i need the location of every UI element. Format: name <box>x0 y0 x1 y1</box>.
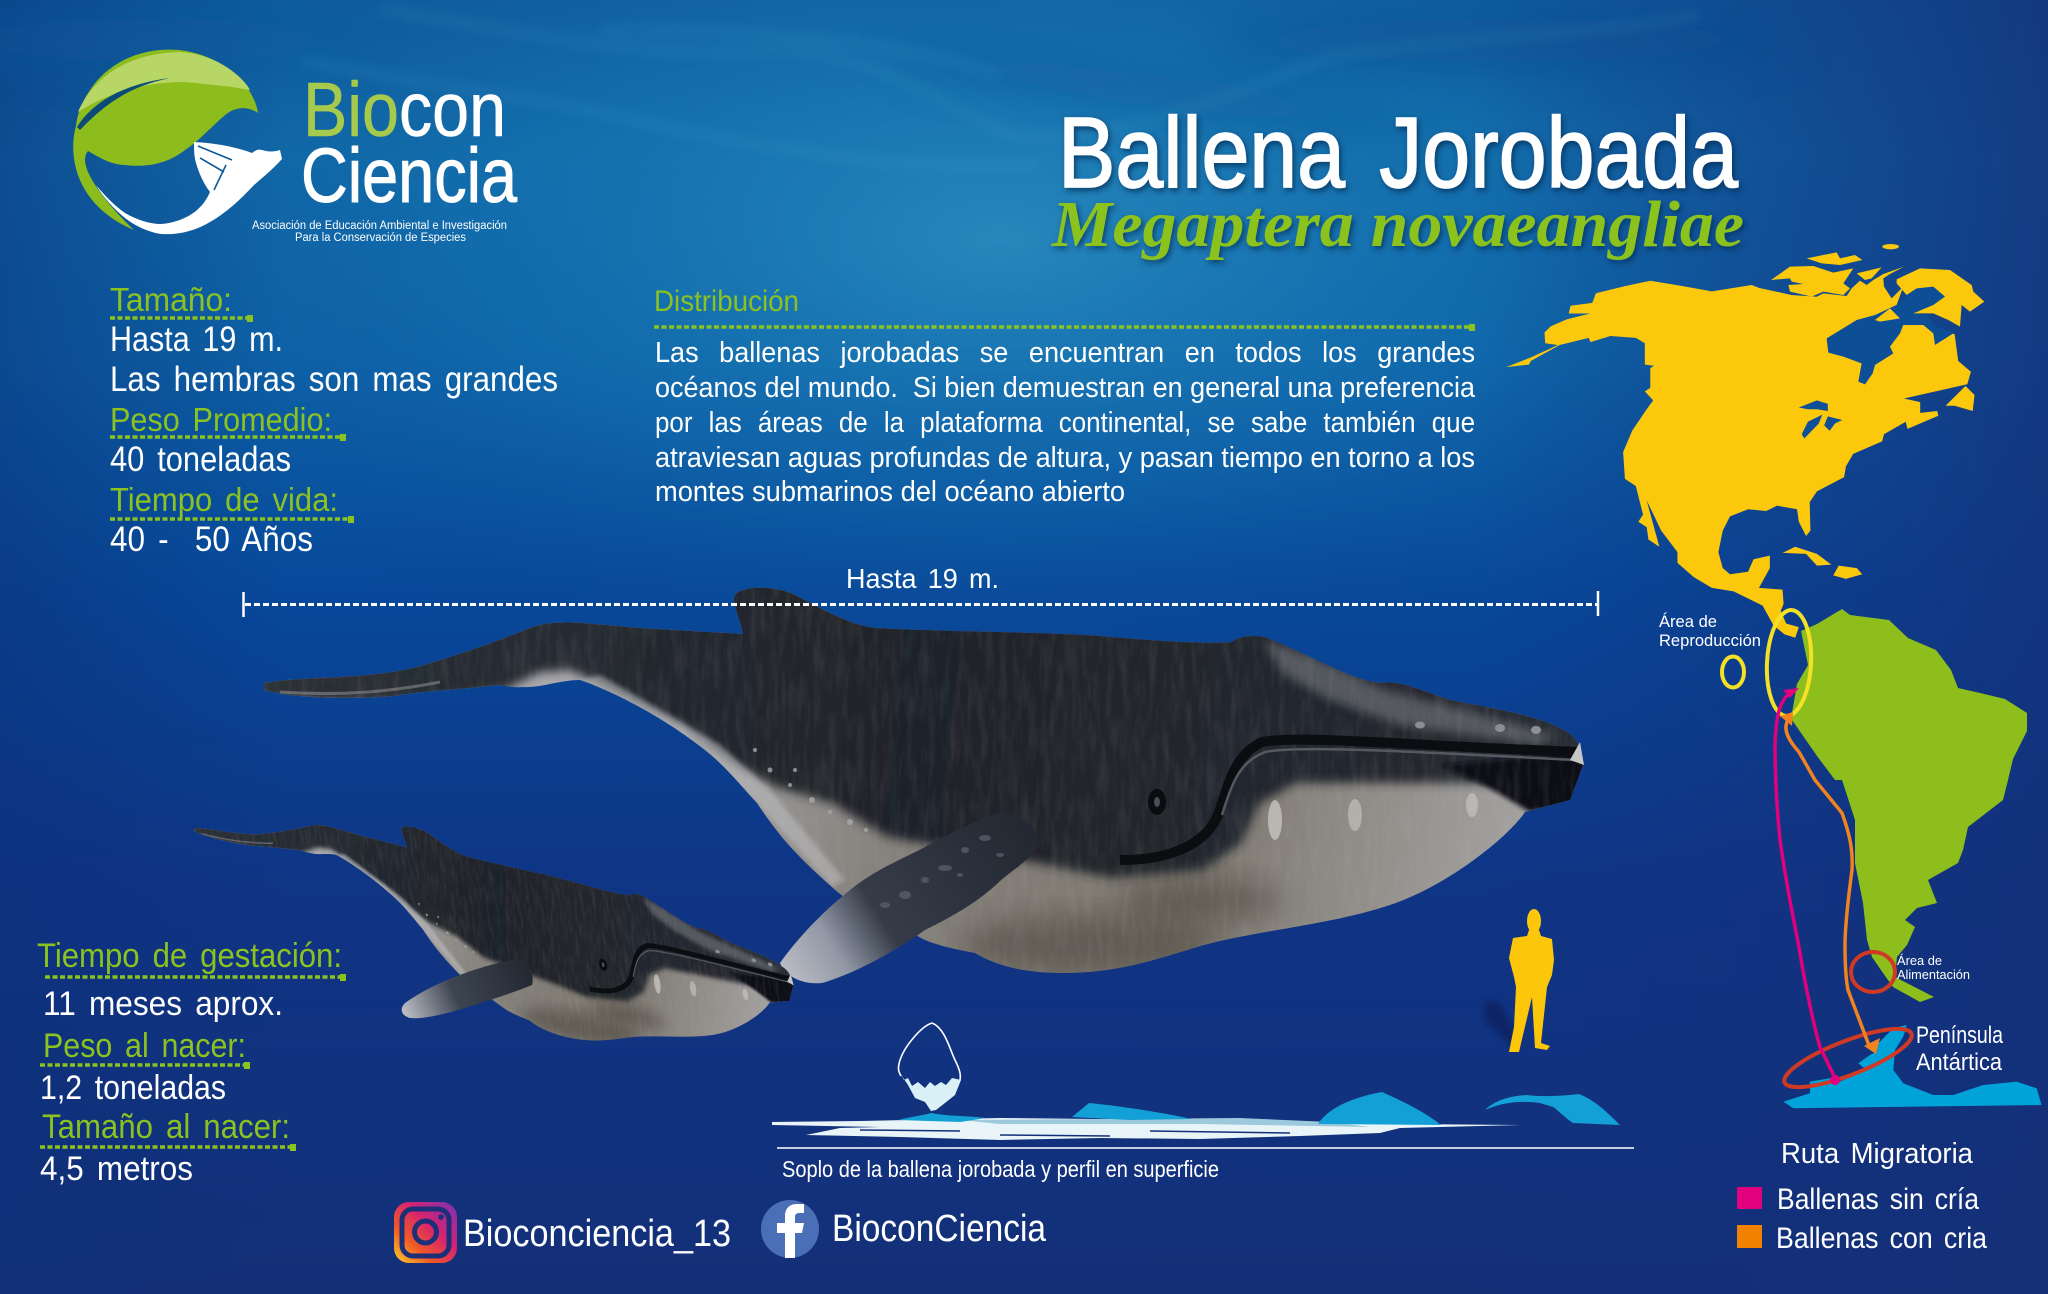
South America <box>1792 609 2027 1002</box>
logo wordmark <box>252 67 517 244</box>
facts panel: calf: 1,2 toneladas <box>40 1069 226 1107</box>
North America <box>1506 281 1975 638</box>
social: facebook <box>761 1200 1047 1258</box>
text block: distribution: atraviesan aguas profundas de altura, y pasan tiempo en torno a los <box>655 442 1475 474</box>
whale blow <box>898 1023 961 1111</box>
area labels: Reproducción <box>1659 631 1761 650</box>
title: Ballena Jorobada <box>1058 97 1738 209</box>
surface foam <box>772 1118 1520 1140</box>
scientific name: Megaptera novaeangliae <box>1051 188 1744 261</box>
facts panel: calf: Peso al nacer: <box>43 1027 246 1065</box>
facts panel: calf: 4,5 metros <box>40 1150 193 1188</box>
text block: distribution: Distribución <box>654 285 799 318</box>
surfacing whale profiles <box>898 1092 1620 1125</box>
feeding area markers <box>1778 952 1918 1098</box>
social: instagram: Bioconciencia_13 <box>463 1213 731 1255</box>
facts panel: adult: Peso Promedio: <box>110 401 332 438</box>
title <box>1051 97 1744 261</box>
logo: Biocon Ciencia <box>73 50 517 244</box>
facts panel: calf: Tiempo de gestación: <box>37 937 342 975</box>
facts panel: adult: 40 toneladas <box>110 440 291 479</box>
legend: migration route: Ruta Migratoria <box>1781 1138 1974 1170</box>
logo wordmark: Asociación de Educación Ambiental e Investigación <box>252 220 507 232</box>
icon: human silhouette for scale <box>1484 909 1554 1052</box>
illustration: blow and surface profile <box>772 1023 1634 1182</box>
map: Americas migration route <box>1506 244 2042 1108</box>
text block: distribution: Las ballenas jorobadas se encuentran en todos los grandes <box>655 337 1475 369</box>
route: whales without calf <box>1775 688 1840 1085</box>
logo wordmark: Ciencia <box>301 133 517 219</box>
text block: distribution: océanos del mundo. Si bien demuestran en general una preferencia <box>655 372 1476 404</box>
area labels: Área de <box>1897 953 1942 968</box>
legend: migration route: Ballenas con cria <box>1776 1222 1987 1255</box>
Antarctic Peninsula <box>1783 1025 2042 1108</box>
logo wordmark: Para la Conservación de Especies <box>295 232 466 244</box>
facts panel: adult: Tiempo de vida: <box>110 481 338 518</box>
facts panel: adult: Las hembras son mas grandes <box>110 360 558 399</box>
social: facebook: BioconCiencia <box>832 1208 1047 1250</box>
area labels: Península <box>1916 1022 2004 1049</box>
caption: Soplo de la ballena jorobada y perfil en superficie <box>782 1156 1219 1182</box>
legend: migration route <box>1737 1138 1987 1255</box>
text block: distribution: montes submarinos del océano abierto <box>655 476 1125 508</box>
text block: distribution: por las áreas de la plataforma continental, se sabe también que <box>655 407 1475 439</box>
logo wordmark: Biocon <box>303 67 506 153</box>
illustration: adult humpback whale <box>240 560 1600 983</box>
area labels: Alimentación <box>1897 967 1970 982</box>
calf flipper <box>402 958 533 1018</box>
legend: migration route: Ballenas sin cría <box>1777 1183 1979 1216</box>
social: instagram <box>394 1202 731 1263</box>
area labels <box>1659 612 2004 1076</box>
facts panel: adult: Hasta 19 m. <box>110 320 283 359</box>
dimension line: Hasta 19 m.: Hasta 19 m. <box>846 563 999 594</box>
facts panel: calf <box>37 937 346 1188</box>
whale flipper <box>780 812 1041 983</box>
area labels: Área de <box>1659 612 1717 631</box>
facts panel: adult <box>110 281 558 559</box>
facts panel: calf: 11 meses aprox. <box>43 985 283 1023</box>
illustration: whale calf <box>176 767 812 1087</box>
area labels: Antártica <box>1916 1049 2003 1076</box>
breeding area markers <box>1722 609 1814 717</box>
route: whales with calf <box>1780 712 1880 1054</box>
facts panel: adult: 40 - 50 Años <box>110 520 313 559</box>
logo icon: leaf and bat <box>73 50 282 234</box>
text block: distribution <box>654 285 1476 508</box>
Arctic islands and Hudson Bay <box>1771 244 1984 384</box>
facts panel: adult: Tamaño: <box>110 281 232 318</box>
facts panel: calf: Tamaño al nacer: <box>42 1108 290 1146</box>
